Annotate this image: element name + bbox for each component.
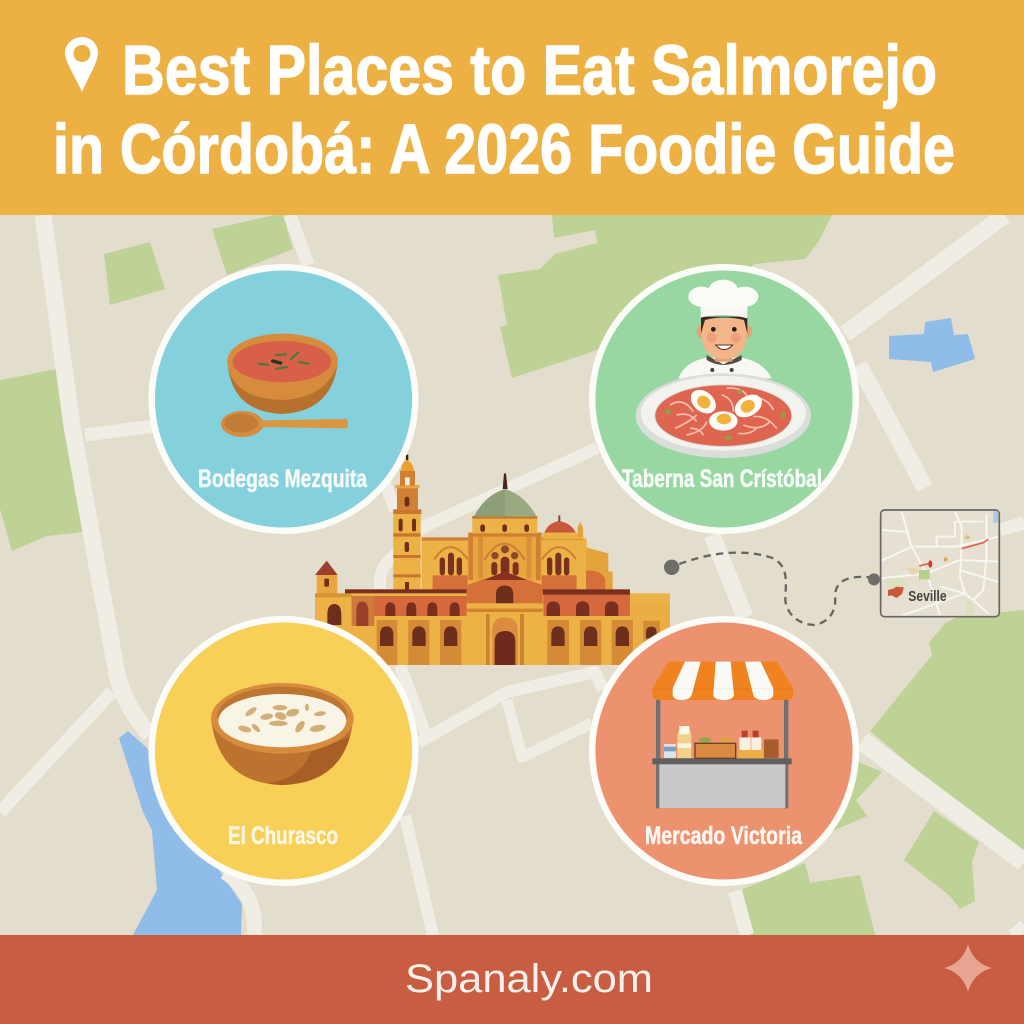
label: Bodegas Mezquita [198, 465, 368, 493]
main upper body [422, 538, 587, 592]
circle: El Churasco [152, 619, 415, 883]
arches upper [434, 544, 576, 560]
awning [652, 662, 793, 700]
icon: white soup bowl [211, 683, 354, 785]
icon: market stall [652, 662, 793, 808]
small dome [543, 533, 583, 539]
central portal [467, 579, 543, 604]
inset map: Seville [881, 510, 999, 617]
label: Taberna San Crístóbal [622, 465, 822, 493]
label: Mercado Victoria [645, 822, 803, 850]
tower [393, 510, 421, 590]
landmark: Mezquita cathedral [315, 455, 670, 665]
small left tower [317, 575, 337, 595]
water [119, 318, 975, 935]
circle: Mercado Victoria [592, 619, 856, 883]
header banner [0, 0, 1024, 215]
icon: sparkle star [944, 944, 992, 992]
green parks [0, 215, 1024, 935]
title [53, 31, 955, 188]
goods [664, 744, 676, 758]
icon: location pin [65, 37, 98, 92]
icon: chef with plate [636, 280, 811, 458]
circle: Taberna San Cristobal [592, 267, 856, 531]
route: dashed line to Seville [664, 553, 880, 625]
footer website text: Spanaly.com [405, 957, 653, 1001]
dome [472, 517, 537, 533]
map background [0, 215, 1024, 935]
lower piers [377, 620, 660, 665]
footer bar [0, 935, 1024, 1024]
lower body [315, 593, 670, 665]
inset label: Seville [908, 589, 947, 605]
label: El Churasco [228, 822, 338, 850]
circle: Bodegas Mezquita [152, 267, 415, 531]
right block [586, 547, 613, 590]
roads [0, 215, 1024, 935]
icon: gazpacho bowl and spoon [221, 334, 348, 437]
